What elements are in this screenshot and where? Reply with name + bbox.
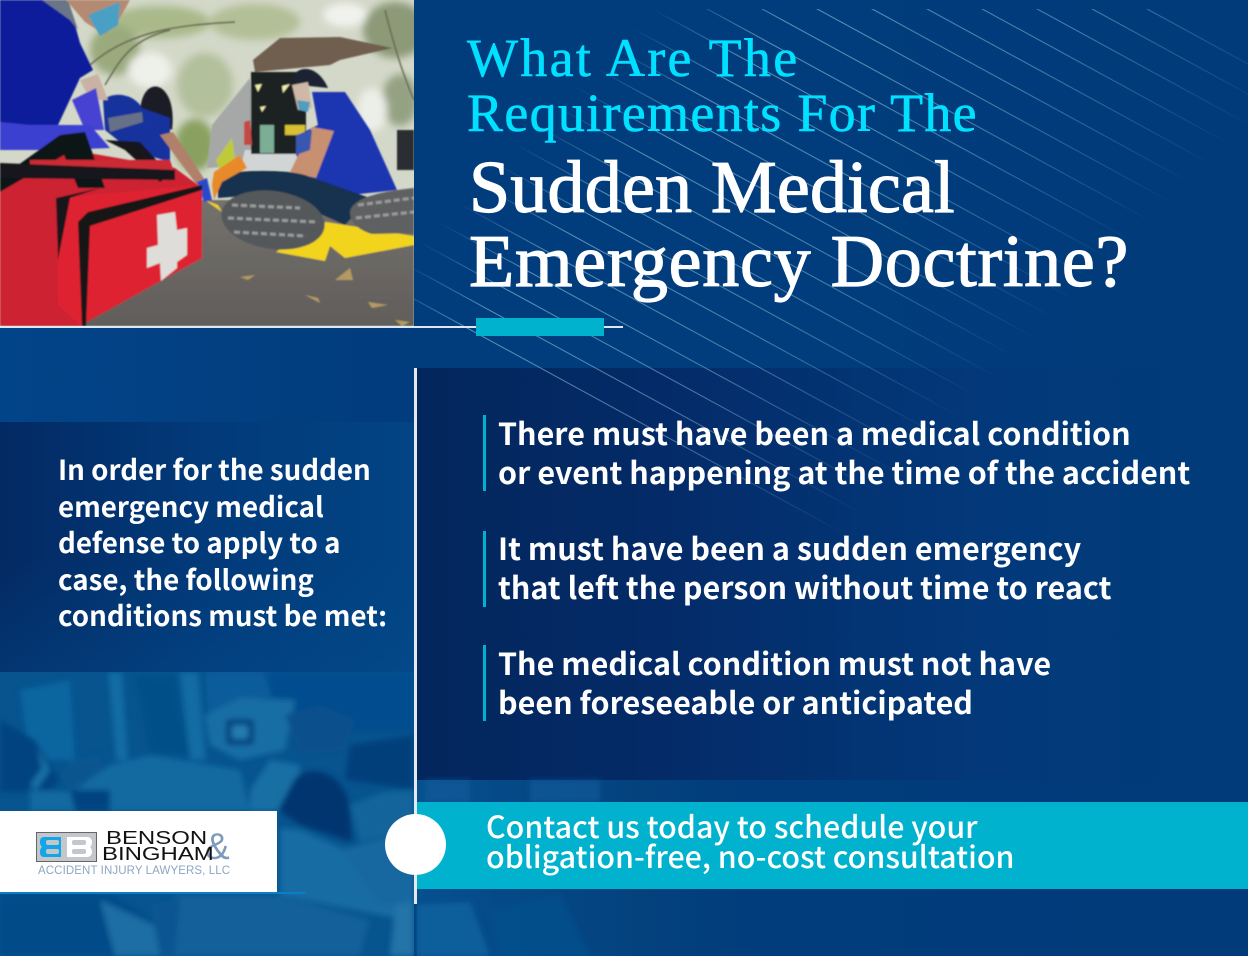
requirement 1: or event happening at the time of the accident (498, 449, 1190, 493)
call to action band: obligation-free, no-cost consultation (486, 833, 1015, 877)
photo bottom rule (0, 326, 476, 328)
logo mark (36, 832, 97, 862)
call to action band (417, 802, 1248, 889)
accent bar (476, 318, 623, 336)
requirement 3 (483, 640, 1051, 723)
intro text: emergency medical (58, 484, 324, 524)
title line: white: Sudden Medical (469, 147, 955, 229)
vertical divider (414, 368, 417, 904)
requirement 3: The medical condition must not have (498, 640, 1051, 684)
leaves (240, 268, 410, 326)
title (466, 28, 1129, 303)
logo tagline: ACCIDENT INJURY LAWYERS, LLC (38, 865, 230, 877)
intro text: In order for the sudden (58, 448, 371, 488)
intro text: defense to apply to a (58, 521, 340, 561)
intro text: conditions must be met: (58, 594, 387, 634)
requirement 2 (483, 525, 1111, 608)
shoes (217, 184, 329, 256)
requirement 1: There must have been a medical condition (498, 410, 1131, 454)
intro text: case, the following (58, 558, 314, 598)
logo card (0, 811, 305, 894)
foliage (90, 2, 427, 171)
stretcher (276, 222, 414, 261)
logo name: BENSON (106, 828, 207, 848)
bottom duotone photo (0, 672, 414, 956)
requirement 2: that left the person without time to react (498, 564, 1111, 608)
logo ampersand: & (205, 826, 230, 867)
white cross (147, 212, 187, 281)
medic on right (292, 69, 328, 88)
title line: white: Emergency Doctrine? (469, 221, 1129, 303)
intro text (58, 448, 387, 634)
patient legs (218, 171, 370, 225)
requirement 3: been foreseeable or anticipated (498, 679, 973, 723)
photo: paramedics treating a patient beside a red first aid bag (0, 0, 414, 326)
logo name second line: BINGHAM (102, 844, 214, 864)
title line: teal: Requirements For The (467, 83, 978, 143)
call to action band: Contact us today to schedule your (486, 803, 978, 847)
requirement 2: It must have been a sudden emergency (498, 525, 1081, 569)
red bag (0, 148, 202, 326)
medic in middle (140, 87, 173, 130)
title line: teal: What Are The (467, 28, 799, 88)
white circle node (385, 814, 446, 875)
medic on left (0, 0, 93, 130)
requirement 1 (483, 410, 1190, 493)
ambulance (207, 78, 258, 168)
photo continuation behind call to action (417, 780, 600, 956)
